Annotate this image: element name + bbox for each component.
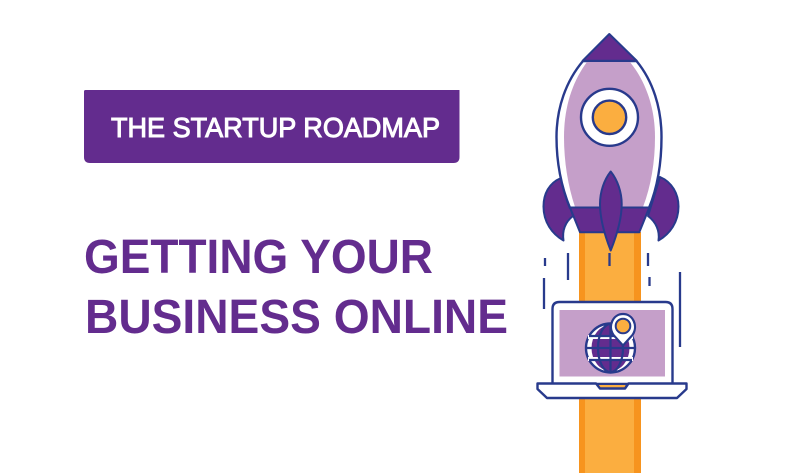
main title: BUSINESS ONLINE [85, 290, 508, 344]
location pin [611, 314, 635, 346]
main title: GETTING YOUR [84, 230, 433, 284]
laptop base [538, 384, 686, 398]
right fin [648, 177, 678, 240]
laptop [538, 302, 686, 398]
lilac body panel [564, 62, 655, 207]
laptop screen [552, 302, 672, 384]
rocket nose cone [583, 34, 637, 61]
rocket base band [570, 208, 649, 232]
globe icon [586, 324, 635, 372]
center fin [600, 172, 622, 250]
banner text: THE STARTUP ROADMAP [111, 112, 440, 143]
rocket body [556, 61, 662, 208]
screen display [560, 310, 665, 376]
left fin [544, 178, 573, 240]
laptop hinge gap [599, 385, 625, 388]
main title [84, 230, 508, 344]
rocket window [581, 89, 638, 146]
rocket exhaust flame [579, 232, 641, 473]
speed lines [544, 253, 680, 347]
header banner [84, 90, 460, 163]
rocket [544, 34, 678, 250]
